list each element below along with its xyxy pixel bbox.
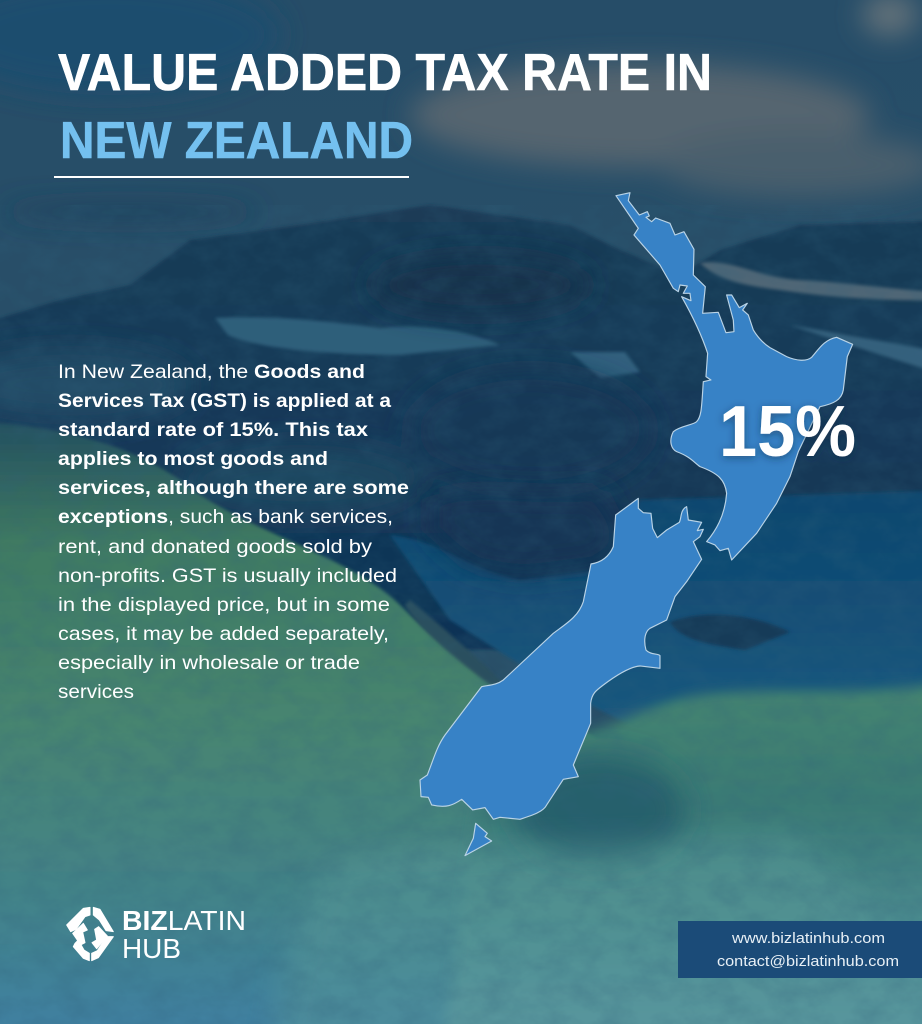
title — [58, 44, 712, 170]
map: South Island — [420, 498, 703, 819]
body text: especially in wholesale or trade — [58, 652, 360, 674]
contact box: contact@bizlatinhub.com — [717, 953, 899, 970]
map: Stewart Island — [465, 823, 492, 856]
map: North Island — [616, 193, 853, 560]
body text: Services Tax (GST) is applied at a — [58, 390, 391, 412]
logo wordmark: BIZLATIN — [122, 905, 246, 936]
logo: Biz Latin Hub: HUB — [122, 933, 181, 964]
title: NEW ZEALAND — [60, 112, 413, 170]
contact box — [678, 921, 922, 978]
body text: services, although there are some — [58, 477, 409, 499]
map: New Zealand — [420, 193, 853, 856]
title underline — [54, 176, 409, 178]
rate: 15%: 15% — [719, 392, 856, 472]
contact box: www.bizlatinhub.com — [731, 930, 885, 947]
body text: non-profits. GST is usually included — [58, 565, 397, 587]
photo texture — [0, 205, 922, 1024]
title: VALUE ADDED TAX RATE IN — [58, 44, 712, 102]
icon: logo mark — [67, 907, 113, 961]
body text: cases, it may be added separately, — [58, 623, 389, 645]
body text: standard rate of 15%. This tax — [58, 419, 368, 441]
logo: Biz Latin Hub — [67, 905, 246, 964]
body text: applies to most goods and — [58, 448, 328, 470]
body text — [58, 361, 409, 703]
body text: in the displayed price, but in some — [58, 594, 390, 616]
body text: rent, and donated goods sold by — [58, 536, 372, 558]
body text: In New Zealand, the Goods and — [58, 361, 365, 383]
body text: exceptions , such as bank services, — [58, 506, 393, 528]
body text: services — [58, 681, 134, 703]
